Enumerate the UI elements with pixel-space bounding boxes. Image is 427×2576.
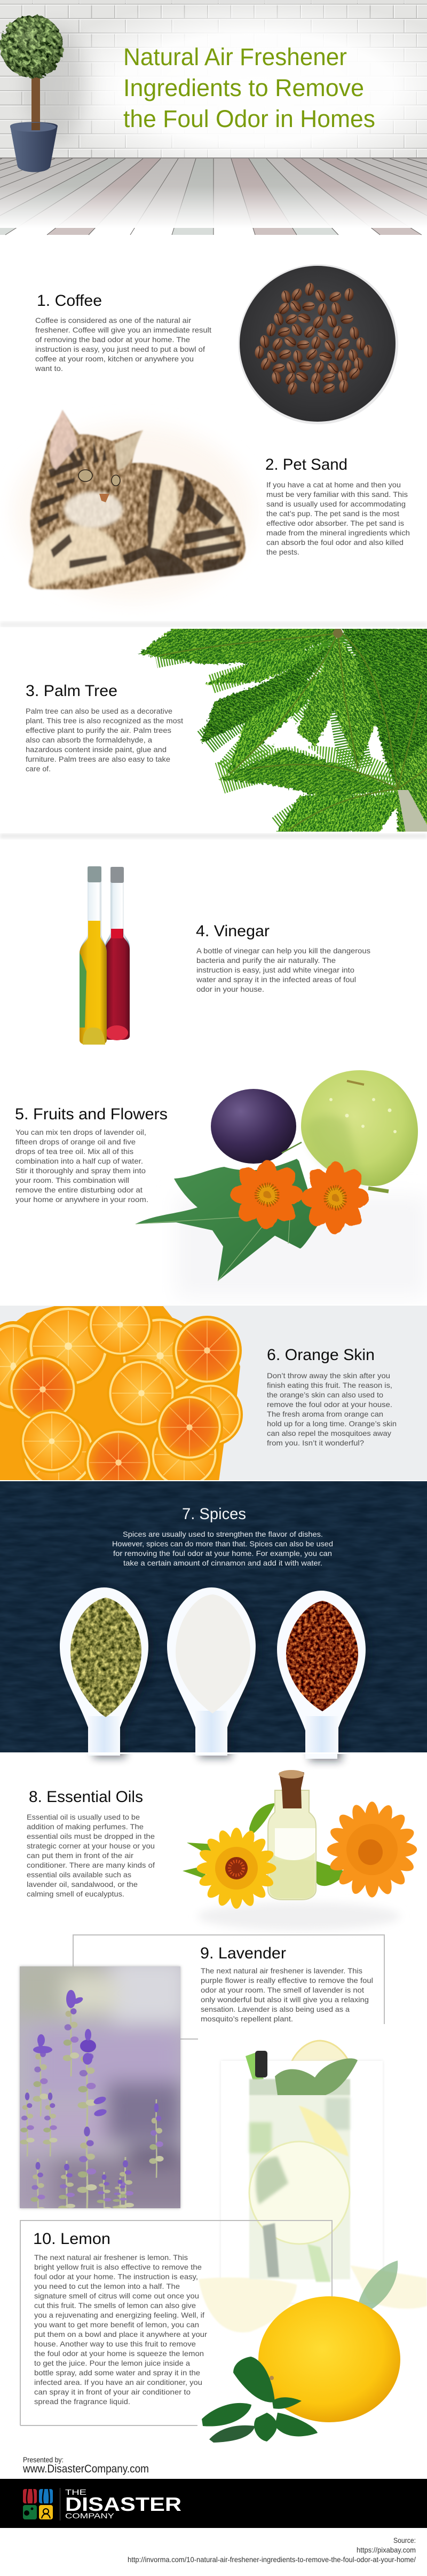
section 5: fruits and flowers text: drops of tea tree oil. Mix all of this [15,1147,133,1156]
frond stems [160,633,427,831]
bottle [268,1770,316,1900]
section 9: lavender text: odor at your room. The smell of lavender is not [201,1986,364,1994]
section 1: coffee text: instruction is easy, you just need to put a bowl of [35,345,205,353]
section 4: vinegar text: water and spray it in the infected areas of foul [196,975,356,984]
section 1: coffee text: want to. [35,364,63,373]
logo wordmark: DISASTER [65,2493,181,2515]
section 6: orange skin text: remove the foul odor at your house. [267,1400,392,1409]
section 3: palm tree text: hazardous content inside paint, glue and [26,745,167,754]
section 6: orange skin text: from you. Isn’t it wonderful? [267,1439,364,1447]
section 1: coffee text [35,292,211,373]
cat dark stripes [37,440,240,582]
red bottle [105,867,130,1040]
section 2: pet sand text: can absorb the foul odor and also killed [266,538,404,547]
section 2: pet sand text: the pests. [266,548,299,556]
section 8: essential oils text: calming smell of eucalyptus. [27,1890,124,1898]
section 10: lemon text: can spray it in front of your air conditioner to [34,2388,191,2396]
header: brick wall and floor [0,0,427,235]
icon: lemon drink glass [199,2041,427,2333]
section 5: fruits and flowers text: You can mix ten drops of lavender oil, [15,1128,146,1136]
frond: right lower [395,737,427,833]
section 4: vinegar text: 4. Vinegar [196,922,270,940]
title: Natural Air Freshener [123,43,347,70]
footer: presented by: www.DisasterCompany.com [22,2463,149,2475]
section 5: fruits and flowers text: your room. This combination will [15,1176,129,1184]
section 3: palm tree text: also can absorb the formaldehyde, a [26,736,152,744]
plum [211,1089,296,1164]
section 2: pet sand text: the cat’s pup. The pet sand is the most [266,509,399,518]
footer: presented by [22,2455,149,2475]
icon: logo squares [23,2489,53,2519]
cat ears [50,410,77,470]
section 4: vinegar text: instruction is easy, just add white vinegar into [196,966,354,974]
wood floor [0,157,427,235]
section 6: orange skin text: Don’t throw away the skin after you [267,1371,390,1380]
white panel [221,2061,383,2303]
section 7: spices text: 7. Spices [182,1505,246,1523]
section 5: fruits and flowers text: remove the entire disturbing odor at [15,1186,143,1194]
frond: top left [138,626,342,664]
footer: source [128,2536,416,2564]
section 8: essential oils text: Essential oil is usually used to be [27,1813,140,1821]
frond: centre left [226,641,335,776]
inner straws [263,2223,279,2277]
icon: plum, apple and flowers [136,1070,427,1297]
yellow calendula [196,1828,276,1909]
title [123,43,375,132]
flower right [302,1161,369,1234]
section 2: pet sand text: If you have a cat at home and then you [266,480,401,489]
section 6: orange skin text: 6. Orange Skin [267,1346,375,1364]
glass [249,2079,350,2279]
spoon: white sugar [167,1587,256,1756]
section 8: essential oils text: conditioner. There are many kinds of [27,1861,155,1869]
title: the Foul Odor in Homes [123,105,375,132]
panel: orange skin band [0,1306,427,1480]
lemon half in glass [299,2106,349,2156]
palm trunk [398,790,427,833]
lavender blooms [33,1990,107,2117]
plant: potted topiary [0,11,67,172]
frond: bottom [276,791,400,833]
section 5: fruits and flowers text: fifteen drops of orange oil and five [15,1137,136,1146]
icon: coffee beans plate [238,264,398,424]
section 2: pet sand text: must be very familiar with this sand. This [266,490,408,499]
section 9: lavender text: mosquito’s repellent plant. [201,2014,293,2023]
frond: small upper left [205,647,327,684]
icon: essential oil bottle and flowers [183,1770,417,1930]
section 5: fruits and flowers text [15,1105,168,1204]
icon: vinegar bottles [80,866,130,1045]
section 9: lavender text: only wonderful but also it will give you a relaxing [201,1995,369,2004]
pot [10,122,58,172]
sky gaps between fronds [262,715,327,759]
frond: lower left [218,749,398,798]
section 8: essential oils text: addition of making perfumes. The [27,1822,144,1831]
spoon: green herbs [60,1587,148,1756]
section 10: lemon text: signature smell of citrus will come out once you [34,2291,199,2300]
section 8: essential oils text: 8. Essential Oils [29,1788,143,1806]
section 6: orange skin text: the orange’s skin can also used to [267,1390,383,1399]
footer: presented by: Presented by: [23,2455,64,2464]
section 1: coffee text: of removing the bad odor at your home. The [35,335,190,344]
section 6: orange skin text: can also repel the mosquitoes away [267,1429,391,1437]
section 10: lemon text: cut this fruit. The smells of lemon can also give [34,2301,196,2310]
section 1: coffee text: 1. Coffee [37,292,102,310]
logo wordmark: COMPANY [65,2511,115,2520]
cat eyes and nose [78,470,92,481]
section 1: coffee text: Coffee is considered as one of the natural air [35,316,191,325]
mint on top of glass [275,2058,358,2095]
section 10: lemon text: to get the juice. Pour the lemon juice inside a [34,2359,190,2367]
section 5: fruits and flowers text: 5. Fruits and Flowers [15,1105,168,1123]
section 8: essential oils text: strategic corner at your house or you [27,1842,155,1850]
orange calendula [327,1801,417,1898]
section 2: pet sand text: sand is usually used for accommodating [266,500,406,508]
flower left [231,1160,303,1229]
icon: palm fronds [138,626,427,833]
section 7: spices text: take a certain amount of cinnamon and add it with water. [123,1559,322,1567]
leaf ball [0,14,64,79]
section 5: fruits and flowers text: Stir it thoroughly and spray them into [15,1166,146,1175]
soft background shade [176,1196,427,1297]
section 8: essential oils text: essential oils available such as [27,1870,131,1879]
section 3: palm tree text: plant. This tree is also recognized as the most [26,716,183,725]
section 10: lemon text [33,2230,207,2406]
section 3: palm tree text: Palm tree can also be used as a decorative [26,707,172,715]
section 10: lemon text: the foul odor at your home is squeeze the lemon [34,2349,204,2358]
section 9: lavender text: 9. Lavender [200,1945,286,1962]
cat muzzle [64,492,123,528]
section 2: pet sand text: 2. Pet Sand [265,456,347,473]
section 10: lemon text: bottle spray, add some water and spray it in the [34,2368,200,2377]
spoon: red saffron [277,1591,366,1759]
section 2: pet sand text: made from the mineral ingredients which [266,528,410,537]
trunk [31,75,40,131]
frond: long left [200,646,331,744]
section 10: lemon text: you want to get more benefit of lemon, you can [34,2320,199,2329]
section 9: lavender text: The next natural air freshener is lavender. This [201,1966,362,1975]
cat cream patches [32,470,240,589]
lemon slice behind glass [286,2041,354,2079]
section 8: essential oils text: lavender oil, sandalwood, or the [27,1880,138,1888]
frond: centre vertical [296,638,379,769]
section 2: pet sand text: effective odor absorber. The pet sand is [266,519,404,527]
section 3: palm tree text: care of. [26,764,51,773]
panel: palm tree band [0,622,427,839]
straws [246,2052,264,2081]
logo wordmark [65,2488,181,2520]
section 5: fruits and flowers text: combination into a half cup of water. [15,1157,143,1165]
section 9: lavender outline box [73,1935,384,2039]
section 3: palm tree text: furniture. Palm trees are also easy to take [26,755,170,763]
feathered leaflets [155,633,398,832]
section 10: lemon text: bright yellow fruit is also effective to remove the [34,2263,202,2271]
apple [301,1070,418,1191]
footer: source: Source: [393,2536,416,2545]
section 6: orange skin text [267,1346,397,1447]
section 7: spices text: Spices are usually used to strengthen the flavor of dishes. [123,1530,323,1538]
section 9: lavender text: purple flower is really effective to remove the foul [201,1976,373,1985]
section 5: fruits and flowers text: your home or anywhere in your room. [15,1195,148,1204]
section 7: spices text [112,1505,333,1567]
reflection [197,1902,400,1930]
spice spoon shadows [65,1590,370,1761]
icon: orange slices [0,1306,243,1480]
section 4: vinegar text: bacteria and purify the air naturally. The [196,956,336,965]
section 10: lemon text: foul odor at your home. The instruction is easy, [34,2272,198,2281]
section 4: vinegar text: odor in your house. [196,985,264,993]
mint sprig [202,2357,318,2443]
lemon fruit [258,2296,400,2422]
section 1: coffee text: freshener. Coffee will give you an immediate result [35,326,211,334]
pale mint leaves behind lemon [358,2261,398,2311]
icon: lavender photo [18,1964,183,2210]
section 6: orange skin text: finish eating this fruit. The reason is, [267,1381,392,1389]
section 3: palm tree text [26,682,183,773]
section 10: lemon text: you a rejuvenating and energizing feeling. Well, if [34,2311,204,2319]
title: Ingredients to Remove [123,74,364,101]
lavender sprigs [20,1990,164,2226]
icon: lemon with mint [202,2261,400,2443]
section 10: lemon text: you need to cut the lemon into a half. The [34,2282,180,2290]
section 1: coffee text: coffee at your room, kitchen or anywhere you [35,354,194,363]
section 2: pet sand text [265,456,410,556]
section 8: essential oils text: can put them in front of the air [27,1851,133,1860]
frond: right mass [342,628,427,795]
logo wordmark: THE [65,2488,86,2497]
footer: black logo band [0,2479,427,2528]
section 10: lemon text: house. Another way to use this fruit to remove [34,2340,196,2348]
yellow bottle [80,866,107,1045]
section 4: vinegar text: A bottle of vinegar can help you kill the dangerous [196,946,370,955]
section 6: orange skin text: hold up for a long time. Orange’s skin [267,1419,397,1428]
leaves [183,1803,348,1886]
section 7: spices text: for removing the foul odor at your home. For example, you can [113,1549,332,1558]
panel: spices slate band [0,1480,427,1761]
section 10: lemon text: spread the fragrance liquid. [34,2397,130,2406]
section 10: lemon outline box [20,2221,332,2425]
section 7: spices text: However, spices can do more than that. Spices can also be used [112,1539,333,1548]
section 8: essential oils text [27,1788,155,1898]
section 3: palm tree text: 3. Palm Tree [26,682,117,700]
section 8: essential oils text: essential oils must be dropped in the [27,1832,155,1840]
leaf [136,1159,319,1281]
section 6: orange skin text: The fresh aroma from orange can [267,1410,383,1418]
footer: source: https://pixabay.com [357,2546,416,2554]
section 3: palm tree text: effective plant to purify the air. Palm trees [26,726,171,734]
lemon wheel in glass [249,2142,350,2244]
section 9: lavender text [200,1945,373,2023]
section 10: lemon text: The next natural air freshener is lemon. This [34,2253,188,2262]
section 9: lavender text: sensation. Lavender is also being used as a [201,2005,350,2013]
lemon wedges [199,2278,297,2333]
section 10: lemon text: infected area. If you have an air conditioner, you [34,2378,202,2387]
section 10: lemon text: put them on a bowl and place it anywhere at your [34,2330,207,2338]
section 4: vinegar text [196,922,370,993]
icon: kitten [13,406,254,600]
section 10: lemon text: 10. Lemon [33,2230,110,2248]
